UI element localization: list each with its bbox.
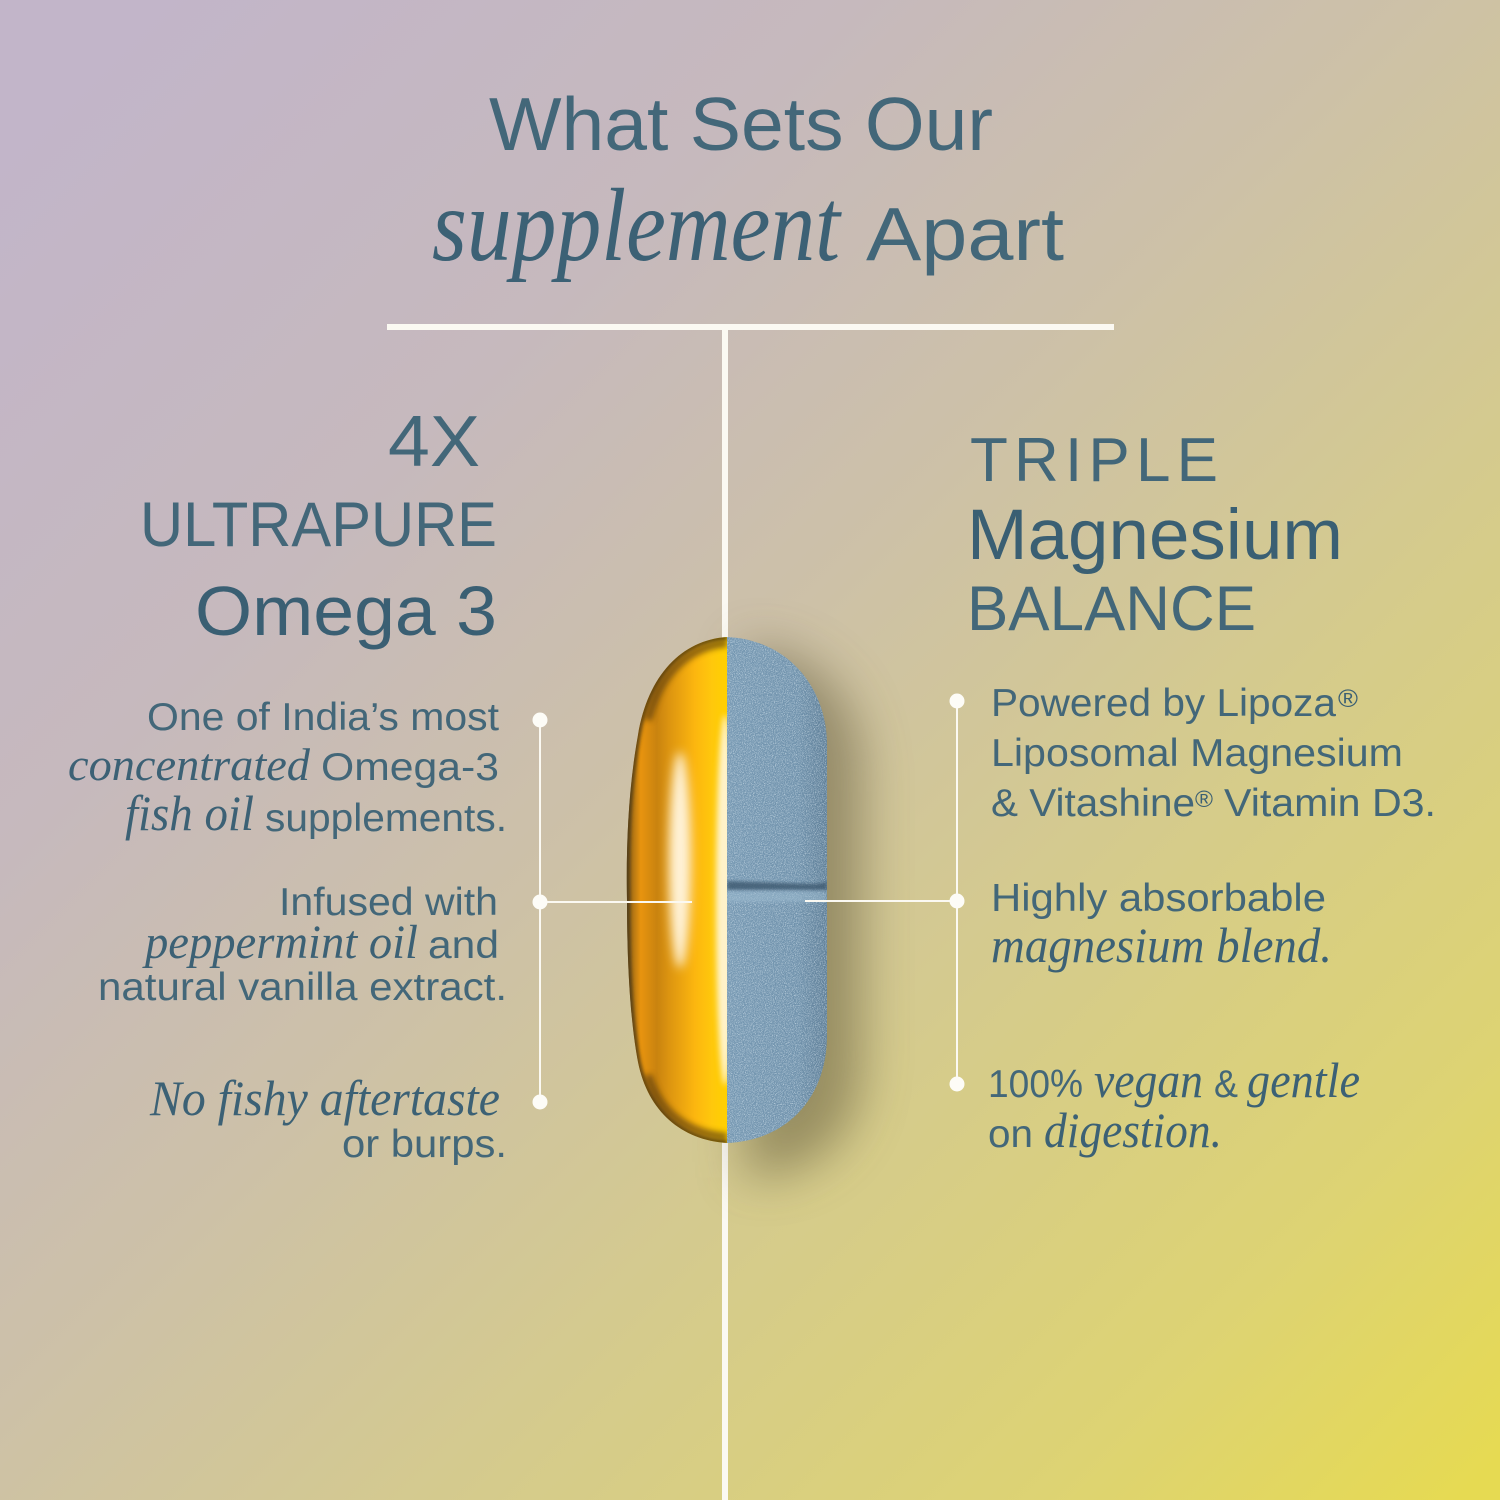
title: What Sets Our [489,82,993,166]
right benefit: absorbable magnesium: Highly absorbable [991,877,1326,920]
heading: triple Magnesium balance: TRIPLE [970,426,1218,495]
left benefit: concentrated omega-3: concentrated [68,739,311,790]
left benefit: no fishy aftertaste: or burps. [342,1123,507,1166]
title: supplement [432,168,842,283]
right benefit: vegan and gentle: & [1214,1063,1238,1106]
left benefit: concentrated omega-3: fish oil [125,785,254,841]
right benefit: vegan and gentle: on [988,1113,1033,1156]
right benefit: Lipoza and Vitashine: & Vitashine [991,782,1195,825]
right benefit: vegan and gentle: digestion. [1044,1102,1222,1158]
right benefit: vegan and gentle: vegan [1094,1052,1203,1108]
left benefit: peppermint oil [98,881,507,1009]
callout lines: magnesium side [805,694,964,1092]
left benefit: no fishy aftertaste: No fishy aftertaste [149,1070,500,1126]
heading: triple Magnesium balance: BALANCE [967,574,1256,644]
heading: 4X ultrapure Omega 3: Omega 3 [195,572,497,650]
right benefit: Lipoza and Vitashine: Vitamin D3. [1224,782,1436,825]
right benefit: Lipoza and Vitashine: ® [1195,786,1213,812]
right benefit: Lipoza and Vitashine [991,682,1436,825]
left benefit: no fishy aftertaste [149,1070,507,1166]
right benefit: vegan and gentle: 100% [988,1063,1083,1106]
divider: horizontal and vertical lines [387,324,1114,1500]
heading: triple Magnesium balance [967,426,1343,644]
right benefit: absorbable magnesium: magnesium blend. [991,917,1332,973]
right benefit: Lipoza and Vitashine: ® [1338,685,1359,713]
left benefit: peppermint oil: and [428,924,499,967]
right benefit: vegan and gentle: gentle [1247,1052,1360,1108]
right benefit: absorbable magnesium [991,877,1332,973]
heading: 4X ultrapure Omega 3: 4X [388,402,480,482]
title [432,82,1064,283]
heading: 4X ultrapure Omega 3 [140,402,497,650]
right benefit: Lipoza and Vitashine: Powered by Lipoza [991,682,1336,725]
tablet shadow [745,645,862,1178]
left benefit: peppermint oil: peppermint oil [142,916,418,969]
softgel capsule half [627,637,734,1143]
left benefit: concentrated omega-3: One of India’s most [147,696,499,739]
left benefit: concentrated omega-3: Omega-3 [321,746,499,789]
right benefit: vegan and gentle [988,1052,1360,1158]
tablet half [727,637,827,1143]
heading: 4X ultrapure Omega 3: ULTRAPURE [140,490,497,560]
title: Apart [866,192,1064,276]
left benefit: concentrated omega-3: supplements. [265,797,507,840]
callout lines: omega side [532,712,692,1110]
right benefit: Lipoza and Vitashine: Liposomal Magnesium [991,732,1403,775]
left benefit: peppermint oil: Infused with [279,881,498,924]
left benefit: concentrated omega-3 [68,696,507,841]
heading: triple Magnesium balance: Magnesium [967,496,1343,575]
left benefit: peppermint oil: natural vanilla extract. [98,966,507,1009]
